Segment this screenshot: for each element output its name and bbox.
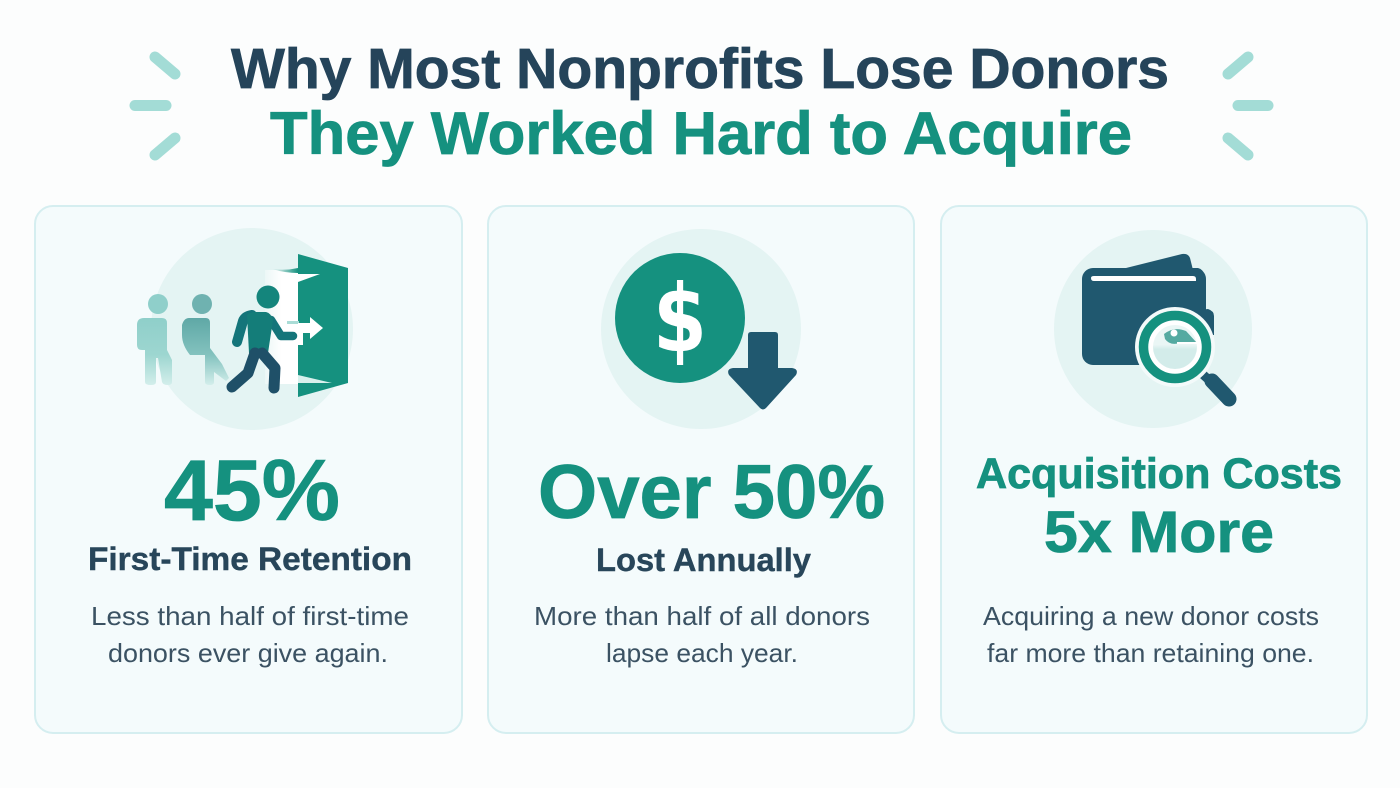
heading: acquisition costs: Acquisition Costs <box>976 450 1342 498</box>
title: Why Most Nonprofits Lose Donors <box>231 37 1169 101</box>
description: More than half of all donors <box>534 601 870 631</box>
stat: 5x more: 5x More <box>1044 500 1274 565</box>
icon: dollar coin with down arrow: $ <box>653 265 707 374</box>
heading: lost annually: Lost Annually <box>596 542 811 578</box>
stat: over 50%: Over 50% <box>538 450 885 535</box>
decorative rays: left <box>135 57 175 155</box>
description <box>534 601 870 668</box>
title: They Worked Hard to Acquire <box>270 100 1132 167</box>
stat: 45%: 45% <box>164 443 340 539</box>
title <box>231 37 1169 167</box>
description: lapse each year. <box>606 638 798 668</box>
description: Acquiring a new donor costs <box>983 601 1319 631</box>
icon: wallet with magnifying glass <box>1054 230 1252 428</box>
heading: first-time retention: First-Time Retention <box>88 541 412 577</box>
panel: first-time retention <box>35 206 462 733</box>
panel: lost annually <box>488 206 914 733</box>
description <box>983 601 1319 668</box>
panel: acquisition costs <box>941 206 1367 733</box>
description <box>91 601 409 668</box>
description: Less than half of first-time <box>91 601 409 631</box>
icon: donors walking out a door <box>137 228 353 430</box>
description: donors ever give again. <box>108 638 388 668</box>
description: far more than retaining one. <box>987 638 1314 668</box>
decorative rays: right <box>1228 57 1268 155</box>
icon: dollar coin with down arrow <box>601 229 801 429</box>
